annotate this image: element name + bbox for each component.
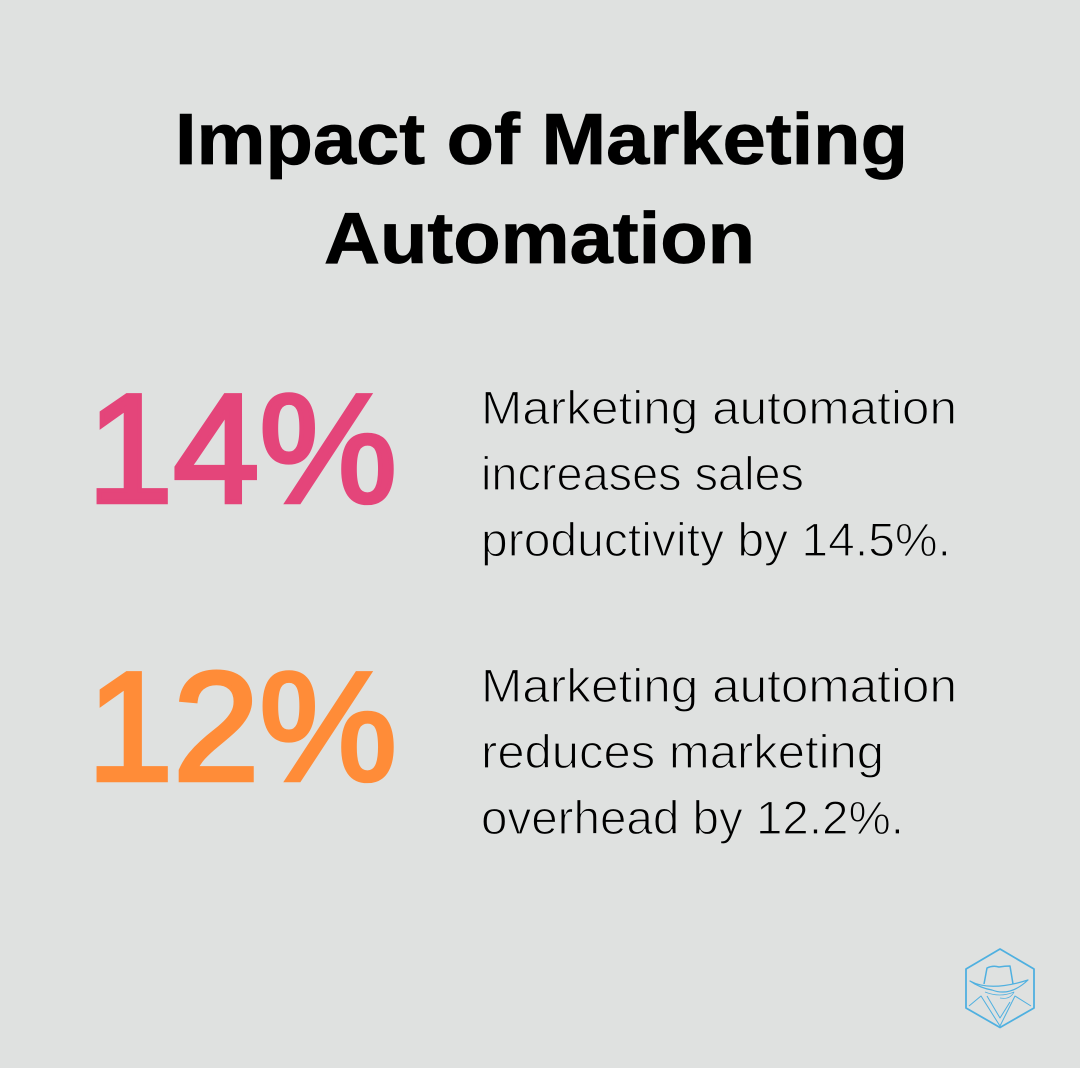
text: sales productivity: Marketing automation <box>481 381 957 434</box>
icon: hexagon logo with hat <box>966 949 1034 1028</box>
text: marketing overhead: reduces marketing <box>481 725 884 778</box>
stat: 12%: 12% <box>87 640 397 813</box>
text: marketing overhead <box>481 659 957 844</box>
text: sales productivity <box>481 381 957 566</box>
title: Automation <box>324 199 755 279</box>
stat: 14%: 14% <box>87 362 397 535</box>
title: Impact of Marketing <box>175 100 908 180</box>
text: sales productivity: increases sales <box>481 447 804 500</box>
text: marketing overhead: overhead by 12.2%. <box>481 791 904 844</box>
text: marketing overhead: Marketing automation <box>481 659 957 712</box>
title <box>175 100 908 279</box>
text: sales productivity: productivity by 14.5%. <box>481 513 951 566</box>
